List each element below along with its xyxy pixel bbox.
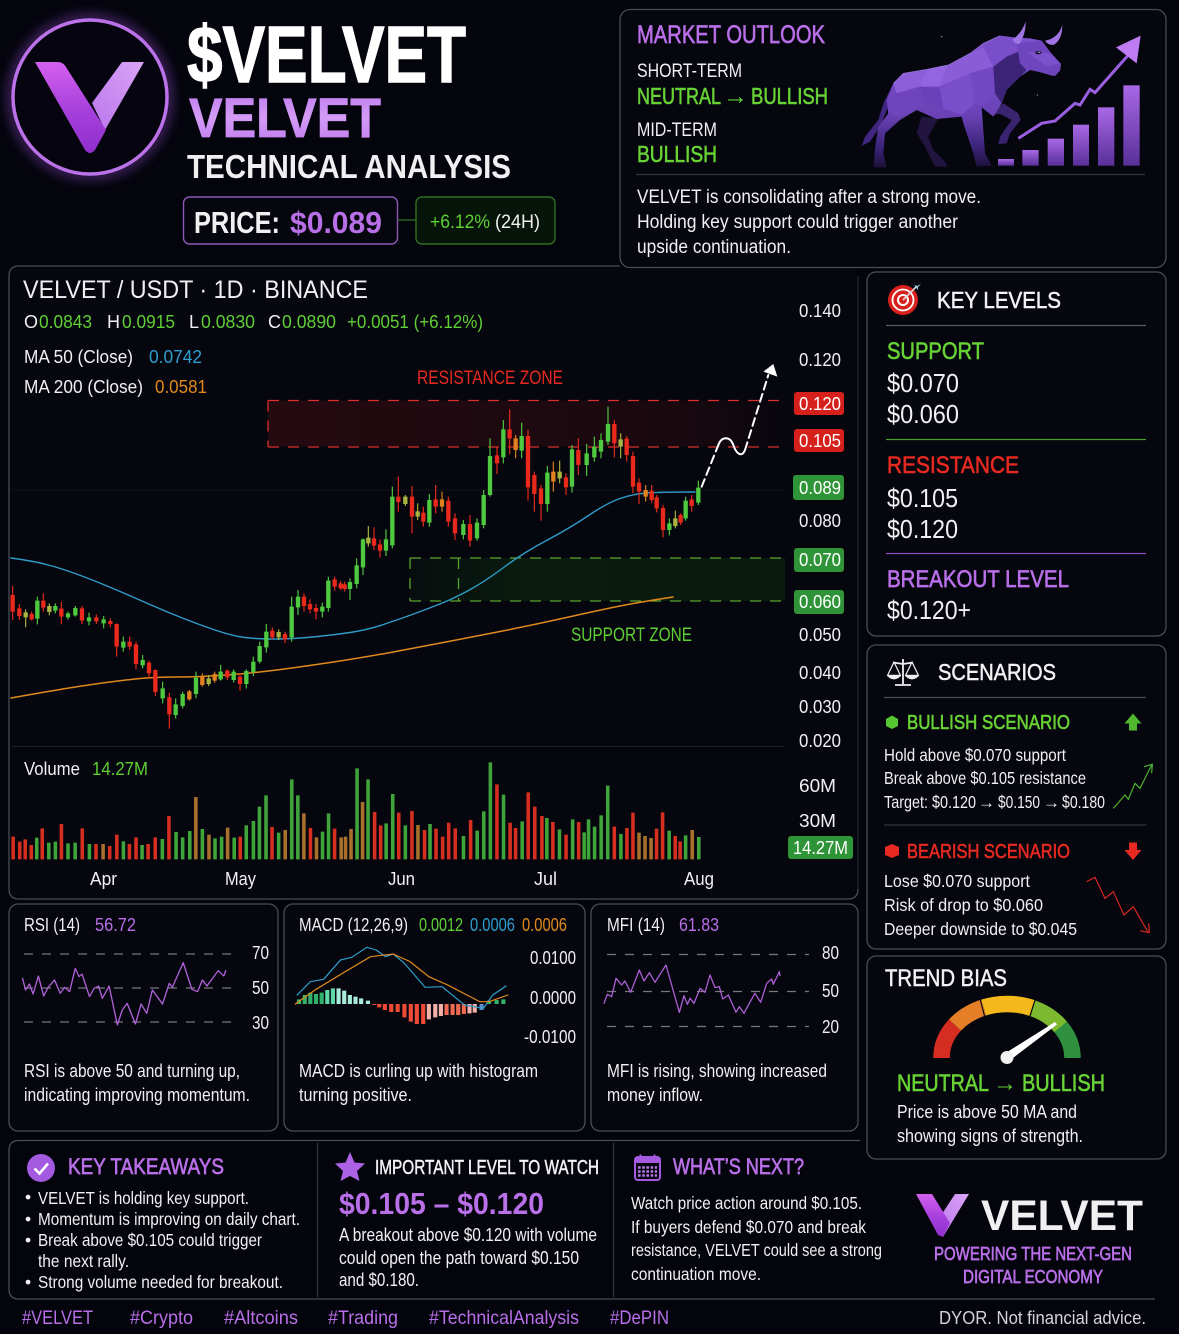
volume axis labels: 60M — [799, 776, 836, 796]
MACD axis labels: 0.0100 — [530, 948, 576, 968]
breakout level: BREAKOUT LEVEL — [887, 566, 1069, 593]
mid-term outlook: MID-TERM — [637, 120, 717, 141]
MFI heading: MFI (14) — [607, 915, 665, 935]
price axis labels: 0.050 — [799, 625, 841, 645]
panel: key levels — [867, 272, 1166, 636]
MACD axis labels: -0.0100 — [524, 1027, 576, 1047]
MFI heading: 61.83 — [679, 915, 719, 935]
short-term outlook: NEUTRAL — [637, 83, 721, 109]
support levels: $0.060 — [887, 399, 959, 429]
footer hashtags — [22, 1308, 669, 1329]
MFI description: money inflow. — [607, 1085, 703, 1105]
subtitle: VELVET: VELVET — [189, 86, 381, 149]
key takeaways: Strong volume needed for breakout. — [38, 1272, 283, 1292]
MFI heading — [607, 915, 719, 935]
RSI axis labels: 50 — [252, 978, 269, 998]
price badge: $0.089 — [290, 205, 382, 240]
MFI axis labels: 80 — [822, 943, 839, 963]
panel: bottom summary — [9, 1140, 1155, 1299]
price axis labels: 0.030 — [799, 697, 841, 717]
support levels — [887, 338, 984, 429]
support levels: $0.070 — [887, 368, 959, 398]
MFI axis labels: 50 — [822, 981, 839, 1001]
body silhouette — [873, 36, 1061, 167]
price level badges: 0.105 — [799, 431, 841, 451]
price level badges: 0.060 — [799, 592, 841, 612]
time axis labels: Aug — [684, 869, 714, 889]
time axis labels: Jun — [388, 869, 415, 889]
candlesticks: left section — [13, 477, 429, 729]
RSI axis labels: 70 — [252, 943, 269, 963]
panel: MACD — [284, 904, 585, 1131]
time axis labels: Apr — [90, 869, 117, 889]
OHLC readout: 0.0890 — [282, 312, 336, 332]
footer hashtags: #DePIN — [610, 1308, 669, 1329]
support zone: SUPPORT ZONE — [571, 625, 692, 646]
bias verdict: BULLISH — [1022, 1070, 1105, 1097]
resistance levels — [887, 452, 1019, 544]
RSI axis labels: 30 — [252, 1013, 269, 1033]
brand lockup: Velvet logo: POWERING THE NEXT-GEN — [934, 1244, 1132, 1264]
key takeaways: Break above $0.105 could trigger — [38, 1230, 262, 1250]
price level badges: 0.089 — [799, 478, 841, 498]
icon: target — [888, 284, 921, 315]
bullish scenario: $0.150 — [998, 792, 1040, 812]
bullish scenario — [884, 712, 1152, 812]
mid-term outlook: BULLISH — [637, 141, 717, 167]
logo: V in circle — [12, 19, 168, 175]
moving average legend: 0.0742 — [149, 347, 202, 367]
panel: market outlook — [620, 10, 1166, 268]
OHLC readout: C — [268, 312, 281, 332]
MACD axis labels — [524, 948, 576, 1047]
volume axis labels: 30M — [799, 811, 836, 831]
icon: down arrow — [1124, 842, 1142, 860]
RSI heading: RSI (14) — [24, 915, 80, 935]
brand lockup: Velvet logo: DIGITAL ECONOMY — [963, 1267, 1103, 1287]
disclaimer: DYOR. Not financial advice. — [939, 1308, 1146, 1328]
bullish scenario: Hold above $0.070 support — [884, 745, 1066, 765]
price badge — [184, 197, 398, 244]
time axis labels: May — [225, 869, 256, 889]
panel: trend bias — [867, 956, 1166, 1159]
bearish scenario: Lose $0.070 support — [884, 871, 1030, 891]
arrow: projected breakout path — [702, 364, 777, 487]
back highlight — [893, 36, 1000, 83]
rising arrow — [1018, 55, 1128, 138]
icon: bull with rising chart — [862, 22, 1141, 167]
resistance levels: RESISTANCE — [887, 452, 1019, 479]
OHLC readout: 0.0843 — [39, 312, 92, 332]
price axis labels: 0.120 — [799, 350, 841, 370]
OHLC readout: O — [24, 312, 38, 332]
price axis labels: 0.040 — [799, 663, 841, 683]
volume label: Volume — [24, 759, 80, 779]
what's next: WHAT’S NEXT? — [673, 1154, 804, 1179]
MACD description: turning positive. — [299, 1085, 412, 1105]
bias verdict: NEUTRAL — [897, 1070, 989, 1097]
support levels: SUPPORT — [887, 338, 984, 365]
volume badge: 14.27M — [793, 838, 848, 858]
important level to watch: could open the path toward $0.150 — [339, 1248, 579, 1268]
heading: trend bias: TREND BIAS — [885, 965, 1007, 992]
MACD heading: MACD (12,26,9) — [299, 915, 408, 935]
tail — [862, 83, 893, 146]
OHLC readout: H — [107, 312, 120, 332]
brand lockup: Velvet logo — [916, 1192, 1143, 1287]
icon: star — [335, 1152, 365, 1181]
bullish scenario: → — [978, 793, 995, 812]
brand lockup: Velvet logo: VELVET — [981, 1192, 1143, 1240]
what's next: Watch price action around $0.105. — [631, 1193, 862, 1213]
price level badges: 0.070 — [799, 550, 841, 570]
resistance zone: RESISTANCE ZONE — [417, 368, 563, 389]
bias verdict — [897, 1070, 1105, 1097]
outlook description: Holding key support could trigger another — [637, 212, 959, 233]
head — [1017, 41, 1061, 76]
50-day moving average line — [11, 492, 695, 639]
MACD description: MACD is curling up with histogram — [299, 1061, 538, 1081]
bullish scenario: Break above $0.105 resistance — [884, 768, 1086, 788]
bearish scenario: Deeper downside to $0.045 — [884, 919, 1077, 939]
RSI line chart — [23, 963, 226, 1025]
mid-term outlook — [637, 120, 717, 167]
MACD chart — [295, 947, 508, 1024]
price badge: PRICE: — [194, 205, 280, 240]
important level to watch: A breakout above $0.120 with volume — [339, 1225, 597, 1245]
MFI line chart — [604, 965, 780, 1013]
24h change badge — [398, 197, 555, 244]
subtitle: technical analysis: TECHNICAL ANALYSIS — [187, 148, 511, 185]
outlook description: VELVET is consolidating after a strong move. — [637, 187, 981, 208]
important level to watch: $0.105 – $0.120 — [339, 1186, 544, 1221]
bearish scenario: Risk of drop to $0.060 — [884, 895, 1043, 915]
moving average legend: MA 50 (Close) — [24, 347, 133, 367]
moving average legend: 0.0581 — [155, 377, 207, 397]
support zone — [410, 558, 785, 646]
icon: check badge — [27, 1154, 55, 1182]
short-term outlook — [637, 61, 828, 110]
bullish scenario: Target: $0.120 — [884, 792, 976, 812]
short-term outlook: SHORT-TERM — [637, 61, 742, 82]
breakout level: $0.120+ — [887, 595, 971, 625]
horns — [1013, 22, 1026, 44]
bias description — [897, 1102, 1083, 1146]
key takeaways: • — [25, 1209, 31, 1229]
RSI description — [24, 1061, 250, 1105]
bearish scenario: BEARISH SCENARIO — [907, 841, 1070, 863]
OHLC readout: 0.0830 — [201, 312, 255, 332]
panel: RSI — [9, 904, 278, 1131]
volume bar chart — [13, 762, 699, 859]
OHLC readout: +0.0051 (+6.12%) — [347, 312, 483, 332]
bias verdict: → — [993, 1070, 1017, 1097]
bias description: Price is above 50 MA and — [897, 1102, 1077, 1122]
chart title: VELVET / USDT · 1D · BINANCE — [23, 276, 368, 304]
footer hashtags: #Crypto — [130, 1308, 193, 1329]
MFI axis labels — [822, 943, 839, 1037]
price level badges — [793, 392, 844, 614]
volume axis labels — [799, 776, 836, 831]
bullish scenario: BULLISH SCENARIO — [907, 712, 1070, 734]
time axis labels: Jul — [534, 869, 557, 889]
what's next: continuation move. — [631, 1264, 761, 1284]
price axis labels: 0.020 — [799, 731, 841, 751]
MFI description — [607, 1061, 827, 1105]
bias description: showing signs of strength. — [897, 1126, 1083, 1146]
important level to watch: IMPORTANT LEVEL TO WATCH — [375, 1157, 599, 1179]
panel: MFI — [591, 904, 858, 1131]
title: $VELVET: $VELVET — [187, 10, 466, 99]
MACD heading: 0.0012 — [419, 915, 463, 935]
important level to watch: and $0.180. — [339, 1270, 419, 1290]
moving average legend — [24, 347, 207, 397]
MACD axis labels: 0.0000 — [530, 988, 576, 1008]
outlook description: upside continuation. — [637, 237, 791, 258]
body facets — [893, 69, 927, 93]
OHLC readout: L — [189, 312, 199, 332]
breakout level — [887, 566, 1069, 625]
bearish scenario — [884, 841, 1149, 939]
RSI heading: 56.72 — [95, 915, 136, 935]
key takeaways — [25, 1154, 300, 1292]
footer hashtags: #VELVET — [22, 1308, 93, 1329]
volume label: 14.27M — [92, 759, 148, 779]
what's next: resistance, VELVET could see a strong — [631, 1240, 882, 1260]
icon: balance scale — [888, 659, 918, 685]
OHLC readout — [24, 312, 483, 332]
key takeaways: • — [25, 1187, 31, 1207]
key takeaways: KEY TAKEAWAYS — [68, 1154, 224, 1179]
resistance zone — [268, 368, 785, 447]
resistance levels: $0.120 — [887, 514, 958, 544]
bullish scenario: $0.180 — [1062, 792, 1105, 812]
MACD heading: 0.0006 — [470, 915, 515, 935]
important level to watch — [335, 1152, 599, 1290]
what's next — [631, 1154, 882, 1284]
24h change badge: (24H) — [495, 212, 540, 233]
RSI description: indicating improving momentum. — [24, 1085, 250, 1105]
volume label — [24, 759, 148, 779]
panel: scenarios — [867, 645, 1166, 949]
RSI heading — [24, 915, 136, 935]
MACD heading: 0.0006 — [522, 915, 567, 935]
price axis labels: 0.140 — [799, 301, 841, 321]
MFI description: MFI is rising, showing increased — [607, 1061, 827, 1081]
key takeaways: • — [25, 1272, 31, 1292]
what's next: If buyers defend $0.070 and break — [631, 1217, 866, 1237]
icon: rising sparkline — [1113, 764, 1152, 808]
OHLC readout: 0.0915 — [122, 312, 175, 332]
gauge chart — [941, 998, 1073, 1064]
heading: key levels: KEY LEVELS — [937, 287, 1061, 313]
price level badges: 0.120 — [799, 394, 841, 414]
moving average legend: MA 200 (Close) — [24, 377, 143, 397]
time axis labels — [90, 869, 714, 889]
heading: scenarios: SCENARIOS — [938, 659, 1056, 685]
footer hashtags: #Altcoins — [224, 1308, 298, 1329]
short-term outlook: → — [723, 82, 748, 110]
footer hashtags: #Trading — [328, 1308, 398, 1329]
candlesticks: right section — [436, 407, 698, 547]
RSI axis labels — [252, 943, 269, 1033]
bars — [998, 159, 1014, 166]
far legs — [990, 103, 1021, 144]
MACD heading — [299, 915, 567, 935]
short-term outlook: BULLISH — [751, 83, 828, 109]
footer hashtags: #TechnicalAnalysis — [429, 1308, 579, 1329]
outlook description — [637, 187, 981, 258]
price axis labels — [799, 301, 841, 751]
MACD description — [299, 1061, 538, 1105]
24h change badge: +6.12% — [430, 212, 490, 233]
key takeaways: Momentum is improving on daily chart. — [38, 1209, 300, 1229]
resistance levels: $0.105 — [887, 483, 958, 513]
icon: calendar — [635, 1154, 660, 1180]
heading: market outlook: MARKET OUTLOOK — [637, 21, 825, 49]
200-day moving average line — [11, 597, 673, 698]
RSI description: RSI is above 50 and turning up, — [24, 1061, 240, 1081]
bullish scenario: → — [1043, 793, 1060, 812]
panel: main price chart — [9, 266, 858, 899]
icon: falling sparkline — [1087, 877, 1149, 933]
icon: up arrow — [1124, 714, 1142, 730]
key takeaways: • — [25, 1230, 31, 1250]
MFI axis labels: 20 — [822, 1017, 839, 1037]
price axis labels: 0.080 — [799, 511, 841, 531]
neck shadow — [993, 52, 1027, 103]
key takeaways: VELVET is holding key support. — [38, 1188, 249, 1208]
key takeaways: the next rally. — [38, 1251, 129, 1271]
